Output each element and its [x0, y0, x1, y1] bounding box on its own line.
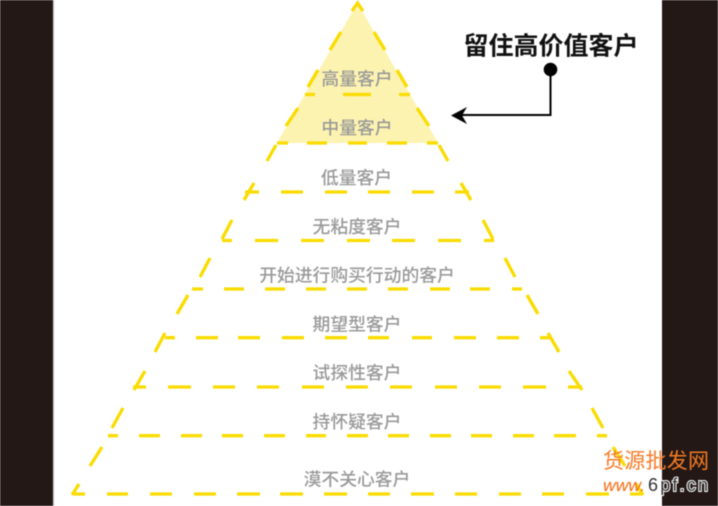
right dark border — [662, 0, 718, 506]
label: starting to buy: 开始进行购买行动的客户 — [259, 266, 455, 286]
label: low volume: 低量客户 — [321, 168, 392, 188]
label: doubtful: 持怀疑客户 — [313, 412, 401, 432]
callout heading: 留住高价值客户 — [463, 32, 639, 60]
watermark — [603, 450, 709, 495]
label: medium volume: 中量客户 — [321, 118, 393, 138]
watermark: site name: 货源批发网 — [603, 450, 709, 473]
watermark: www: www. — [603, 476, 645, 495]
highlighted pyramid top — [277, 3, 438, 143]
tier dividers — [74, 94, 642, 494]
label: expectant: 期望型客户 — [313, 314, 401, 334]
left dark border — [0, 0, 54, 506]
pyramid outline — [72, 3, 643, 495]
label: indifferent: 漠不关心客户 — [304, 470, 410, 490]
label: no stickiness: 无粘度客户 — [313, 217, 401, 237]
pyramid apex — [352, 3, 363, 11]
watermark: domain: 6pf.cn — [648, 475, 708, 495]
left edge — [72, 32, 341, 495]
tier labels — [259, 69, 455, 490]
right edge — [374, 32, 643, 495]
label: high volume: 高量客户 — [321, 69, 393, 89]
callout arrow — [451, 63, 557, 124]
label: testing: 试探性客户 — [313, 363, 401, 383]
